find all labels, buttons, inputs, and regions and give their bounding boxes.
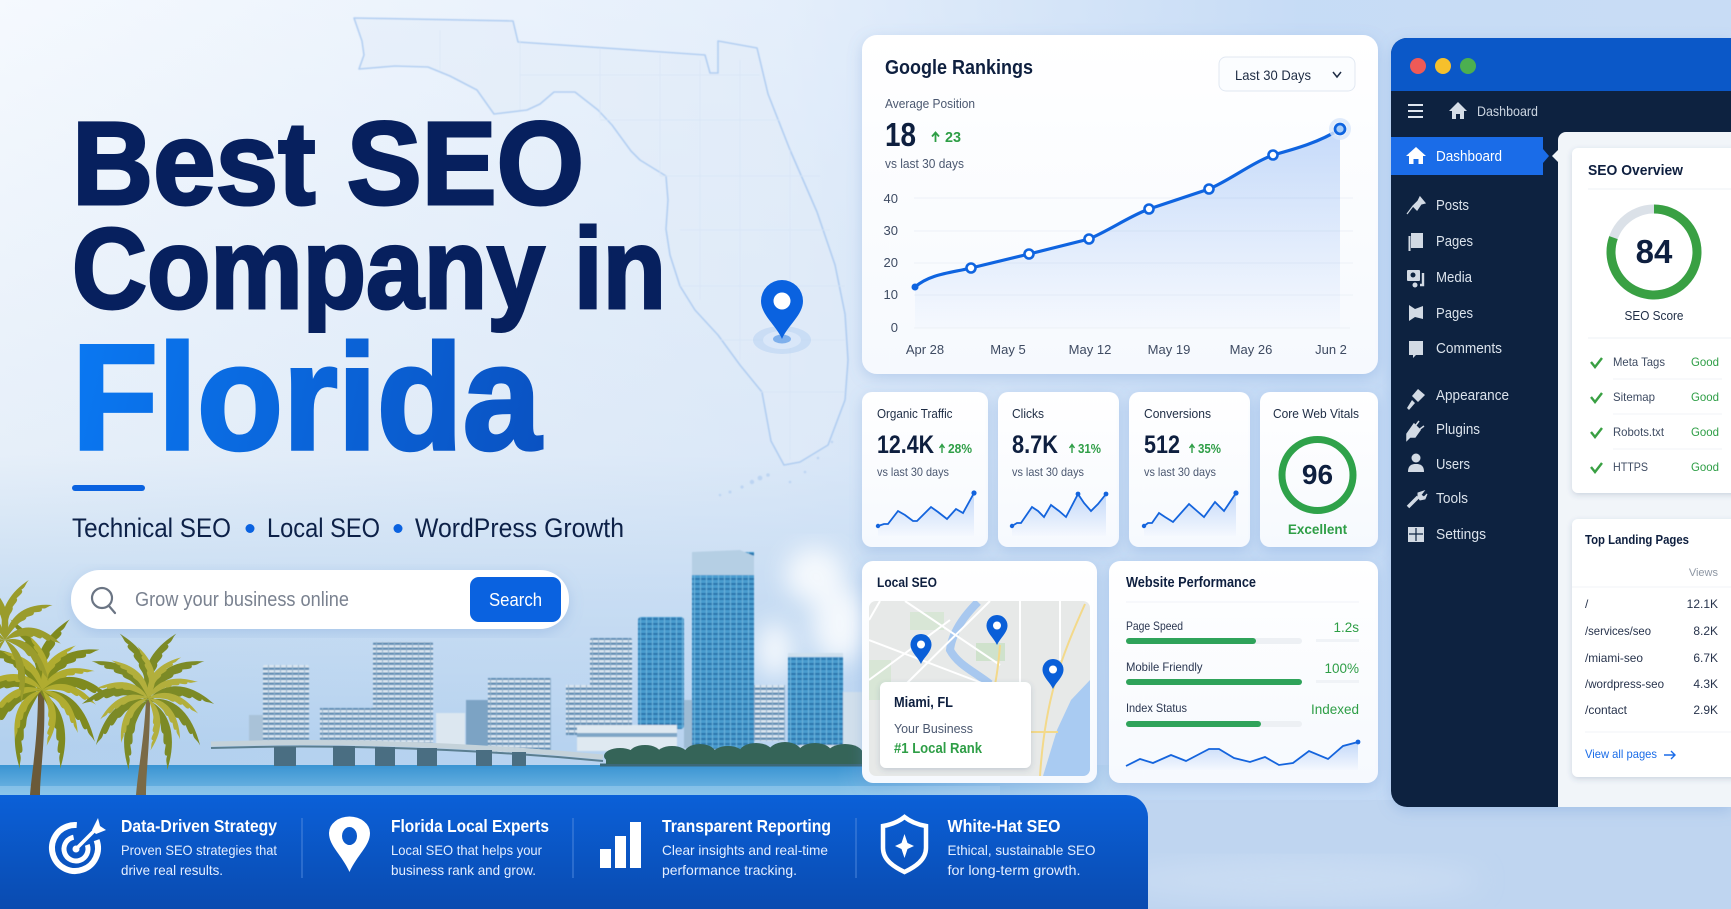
search bar: Grow your business online — [135, 589, 349, 611]
panel: seo overview — [1572, 148, 1731, 493]
map pin — [753, 280, 811, 354]
icon: shield — [883, 817, 926, 872]
line chart: 10 — [884, 287, 898, 302]
mobile friendly bar: Mobile Friendly — [1126, 660, 1202, 674]
panel: website performance: Website Performance — [1126, 575, 1256, 591]
page table: /services/seo — [1585, 624, 1651, 638]
mobile friendly bar: 100% — [1324, 661, 1359, 676]
pages flag — [1409, 305, 1473, 322]
map — [869, 601, 1090, 776]
bottom benefits band: drive real results. — [121, 862, 223, 878]
subtitle: Technical SEO — [72, 513, 231, 543]
checklist — [1591, 355, 1722, 474]
location callout: #1 Local Rank — [894, 741, 983, 757]
line chart: Apr 28 — [906, 342, 944, 357]
media — [1407, 269, 1473, 288]
settings: Settings — [1436, 526, 1486, 543]
stat card: conversions: Conversions — [1144, 406, 1211, 421]
icon: location pin — [329, 817, 370, 872]
view all link: View all pages — [1585, 747, 1657, 761]
bottom benefits band: performance tracking. — [662, 862, 797, 878]
panel: website performance — [1109, 561, 1378, 783]
panel: top landing pages — [1572, 519, 1731, 777]
line chart — [884, 118, 1353, 357]
page table: 8.2K — [1693, 624, 1718, 638]
page table: / — [1585, 597, 1589, 611]
subtitle: WordPress Growth — [415, 513, 624, 543]
subtitle — [72, 513, 624, 543]
location callout — [880, 682, 1031, 768]
water — [0, 765, 1130, 797]
panel: local seo — [862, 561, 1097, 783]
stat card: clicks: vs last 30 days — [1012, 465, 1084, 479]
page table: 4.3K — [1693, 677, 1718, 691]
location callout: Your Business — [894, 721, 973, 736]
page table: /contact — [1585, 703, 1628, 717]
tools: Tools — [1436, 490, 1468, 507]
pages flag: Pages — [1436, 305, 1473, 322]
comments: Comments — [1436, 340, 1502, 357]
stat card: conversions: 512 — [1144, 431, 1180, 459]
bottom benefits band: Clear insights and real-time — [662, 842, 828, 858]
panel: seo overview: SEO Overview — [1588, 162, 1683, 179]
page speed bar — [1126, 619, 1359, 644]
panel: seo overview: SEO Score — [1624, 308, 1684, 323]
stat card: core web vitals — [1260, 392, 1378, 547]
panel: top landing pages: Top Landing Pages — [1585, 532, 1689, 547]
bottom benefits band: White-Hat SEO — [948, 816, 1060, 836]
gauge 96 — [1282, 440, 1353, 510]
icon: target — [46, 818, 106, 877]
ranking change: 23 — [945, 129, 961, 146]
active menu item: Dashboard — [1436, 148, 1502, 165]
title — [72, 98, 666, 481]
line chart: 20 — [884, 255, 898, 270]
active menu item — [1391, 137, 1549, 175]
bottom benefits band: Ethical, sustainable SEO — [948, 842, 1096, 858]
settings — [1408, 526, 1486, 543]
subtitle: Local SEO — [267, 513, 380, 543]
bottom benefits band: Proven SEO strategies that — [121, 842, 277, 858]
panel: local seo: Local SEO — [877, 574, 937, 590]
checklist: Sitemap — [1613, 390, 1655, 404]
gauge: seo score: 84 — [1636, 233, 1673, 270]
line chart: May 5 — [990, 342, 1026, 357]
icon: magnifier — [92, 588, 115, 613]
checklist: Meta Tags — [1613, 355, 1665, 369]
icon: home — [1449, 102, 1467, 119]
line chart: 40 — [884, 191, 898, 206]
index status bar — [1126, 701, 1359, 727]
mobile friendly bar — [1126, 660, 1359, 685]
stat card: core web vitals: Core Web Vitals — [1273, 406, 1359, 421]
stat card: core web vitals: Excellent — [1288, 522, 1348, 537]
index status bar: Indexed — [1311, 702, 1359, 717]
line chart: May 19 — [1148, 342, 1190, 357]
appearance — [1407, 387, 1509, 410]
dashboard window: Dashboard — [1477, 103, 1538, 119]
posts: Posts — [1436, 197, 1469, 214]
bottom benefits band: Local SEO that helps your — [391, 842, 542, 858]
page speed bar: 1.2s — [1333, 620, 1359, 635]
stat card: clicks: 8.7K — [1012, 431, 1058, 459]
stat card: conversions: 35% — [1198, 442, 1221, 456]
palm trees — [0, 575, 214, 795]
bottom benefits band: business rank and grow. — [391, 862, 536, 878]
stat card: clicks — [998, 392, 1119, 547]
line chart: Jun 2 — [1315, 342, 1347, 357]
accent line — [72, 485, 145, 491]
stat card: organic traffic: Organic Traffic — [877, 406, 953, 421]
title: Florida — [72, 313, 542, 481]
users: Users — [1436, 456, 1470, 473]
panel: google rankings: vs last 30 days — [885, 156, 964, 171]
window controls — [1410, 58, 1476, 74]
search bar: Search — [489, 589, 542, 610]
gauge 96: 96 — [1302, 459, 1333, 490]
icon: menu — [1408, 105, 1423, 117]
page table — [1585, 597, 1718, 717]
cloud behind skyline — [757, 547, 868, 678]
line chart: 30 — [884, 223, 898, 238]
bottom benefits band — [0, 795, 1148, 909]
map pins — [910, 615, 1064, 689]
checklist: Good — [1691, 355, 1719, 369]
stat card: conversions: vs last 30 days — [1144, 465, 1216, 479]
users — [1408, 454, 1470, 473]
date dropdown — [1219, 57, 1355, 91]
page table: /wordpress-seo — [1585, 677, 1664, 691]
media: Media — [1436, 269, 1473, 286]
sparkline — [1142, 490, 1239, 536]
stat card: organic traffic — [862, 392, 988, 547]
panel: google rankings: Google Rankings — [885, 57, 1033, 79]
stat card: organic traffic: 12.4K — [877, 431, 934, 459]
page speed bar: Page Speed — [1126, 619, 1183, 633]
plugins — [1407, 421, 1480, 440]
location callout: Miami, FL — [894, 694, 953, 711]
line chart: May 12 — [1069, 342, 1111, 357]
stat card: conversions — [1129, 392, 1250, 547]
title: Best SEO — [72, 98, 584, 230]
search bar — [71, 570, 569, 629]
index status bar: Index Status — [1126, 701, 1187, 715]
bottom benefits band: Data-Driven Strategy — [121, 816, 277, 836]
date dropdown: Last 30 Days — [1235, 67, 1311, 83]
checklist: Good — [1691, 390, 1719, 404]
panel: top landing pages: Views — [1689, 567, 1718, 579]
page table: /miami-seo — [1585, 651, 1643, 665]
florida map outline — [354, 18, 848, 496]
title: Company in — [72, 206, 666, 333]
sparkline — [1010, 492, 1108, 536]
plugins: Plugins — [1436, 421, 1480, 438]
checklist: HTTPS — [1613, 460, 1648, 474]
ranking change — [932, 129, 961, 146]
sidebar menu — [1407, 197, 1509, 543]
skyline — [249, 550, 862, 762]
line chart: May 26 — [1230, 342, 1272, 357]
stat card: clicks: 31% — [1078, 442, 1101, 456]
page table: 12.1K — [1687, 597, 1718, 611]
checklist: Robots.txt — [1613, 425, 1665, 439]
tools — [1408, 490, 1468, 507]
bottom benefits band: Florida Local Experts — [391, 816, 549, 836]
pages: Pages — [1436, 233, 1473, 250]
line chart: 0 — [891, 320, 898, 335]
bottom benefits band: Transparent Reporting — [662, 816, 831, 836]
appearance: Appearance — [1436, 387, 1509, 404]
stat card: organic traffic: 28% — [948, 442, 972, 456]
comments — [1409, 340, 1502, 358]
icon: bar chart — [600, 822, 641, 868]
page table: 6.7K — [1693, 651, 1718, 665]
panel: google rankings: 18 — [885, 116, 916, 153]
checklist: Good — [1691, 425, 1719, 439]
bottom benefits band: for long-term growth. — [948, 862, 1080, 878]
pages — [1408, 233, 1473, 251]
panel: google rankings — [862, 35, 1378, 374]
checklist: Good — [1691, 460, 1719, 474]
posts — [1407, 197, 1469, 214]
panel: google rankings: Average Position — [885, 96, 975, 111]
dashboard window — [1391, 38, 1731, 807]
gauge: seo score — [1611, 209, 1697, 295]
bridge and shore trees — [211, 742, 863, 766]
sparkline — [876, 490, 977, 536]
performance sparkline — [1126, 740, 1360, 770]
stat card: organic traffic: vs last 30 days — [877, 465, 949, 479]
page table: 2.9K — [1693, 703, 1718, 717]
stat card: clicks: Clicks — [1012, 406, 1044, 421]
